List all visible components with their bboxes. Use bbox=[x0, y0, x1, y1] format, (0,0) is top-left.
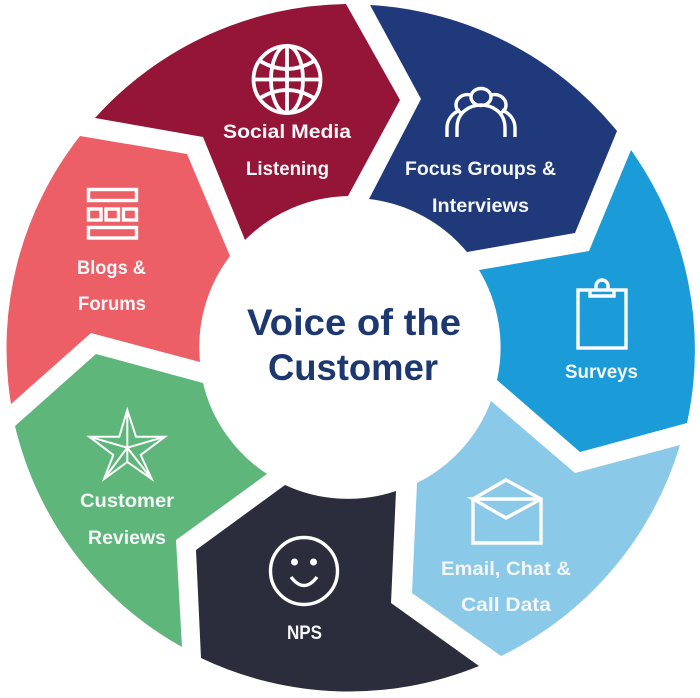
label: NPS bbox=[287, 623, 322, 644]
panel: customer reviews bbox=[15, 354, 267, 647]
icon: clipboard bbox=[578, 280, 626, 348]
icon: smiley face bbox=[270, 538, 338, 604]
title line one: Voice of the bbox=[247, 302, 461, 343]
icon: globe bbox=[254, 46, 320, 113]
segment shape: coral bbox=[6, 136, 230, 404]
label: Focus Groups & bbox=[405, 159, 556, 180]
panel: NPS bbox=[196, 485, 479, 691]
segment shape: blue bbox=[479, 150, 695, 452]
center title bbox=[247, 302, 461, 388]
label second line: Call Data bbox=[461, 595, 551, 616]
panel: surveys bbox=[479, 150, 695, 452]
panel: social media listening bbox=[95, 4, 400, 240]
label: Surveys bbox=[565, 362, 638, 383]
label second line: Reviews bbox=[88, 528, 166, 549]
panel: blogs and forums bbox=[6, 136, 230, 404]
panel: focus groups and interviews bbox=[369, 5, 617, 252]
panel: email, chat and call data bbox=[412, 401, 680, 656]
label: Blogs & bbox=[77, 258, 146, 279]
label second line: Forums bbox=[78, 294, 146, 315]
icon: group of people bbox=[447, 88, 515, 137]
segment shape: green bbox=[15, 354, 267, 647]
segment shape: crimson bbox=[95, 4, 400, 240]
segment shape: navy bbox=[369, 5, 617, 252]
label second line: Listening bbox=[246, 159, 329, 180]
segment shape: dark bbox=[196, 485, 479, 691]
icon: envelope bbox=[473, 480, 541, 543]
label: Customer bbox=[80, 491, 175, 512]
segment shape: light blue bbox=[412, 401, 680, 656]
title line two: Customer bbox=[268, 347, 438, 388]
label: Email, Chat & bbox=[441, 559, 571, 580]
icon: star bbox=[89, 410, 165, 479]
label: Social Media bbox=[223, 122, 351, 143]
label second line: Interviews bbox=[432, 196, 529, 217]
icon: page layout blocks bbox=[88, 190, 136, 238]
